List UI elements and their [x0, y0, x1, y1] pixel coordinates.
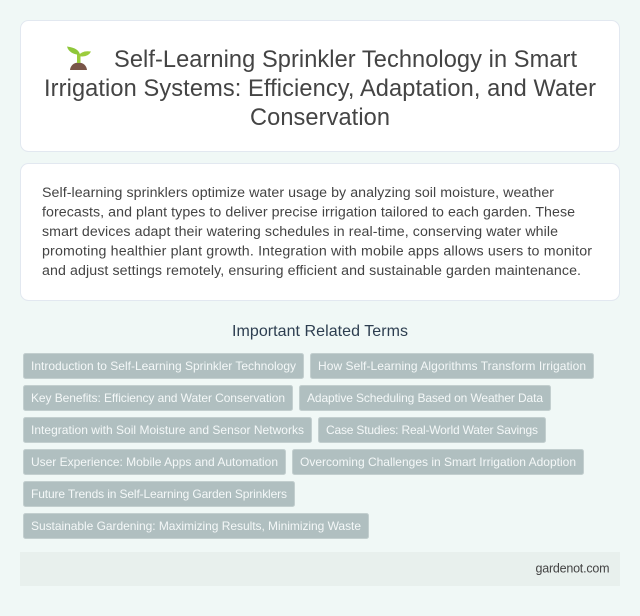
tag: user experience: User Experience: Mobile Apps and Automation	[31, 455, 278, 469]
heading: related terms: Important Related Terms	[232, 323, 408, 340]
tag: user experience	[24, 450, 286, 474]
text block: summary: Self-learning sprinklers optimize water usage by analyzing soil moisture, weather	[42, 185, 554, 201]
title	[44, 47, 596, 131]
panel: summary card	[20, 164, 620, 300]
tag: sustainable gardening: Sustainable Gardening: Maximizing Results, Minimizing Waste	[31, 519, 361, 533]
tag: adaptive scheduling: Adaptive Scheduling Based on Weather Data	[307, 391, 543, 405]
text block: summary: forecasts, and plant types to deliver precise irrigation tailored to each garden. These	[42, 204, 575, 220]
footer: gardenot.com	[536, 562, 610, 576]
tag: sustainable gardening	[24, 514, 368, 538]
tag: challenges: Overcoming Challenges in Smart Irrigation Adoption	[300, 455, 576, 469]
tag: key benefits: Key Benefits: Efficiency and Water Conservation	[31, 391, 285, 405]
text block: summary	[42, 185, 592, 279]
tag: case studies: Case Studies: Real-World Water Savings	[326, 423, 538, 437]
panel: title card	[20, 20, 620, 152]
tag: future trends	[24, 482, 294, 506]
tag: algorithms	[310, 354, 594, 378]
panel: related term tags	[24, 354, 594, 538]
tag: soil moisture	[24, 418, 312, 442]
title: Self-Learning Sprinkler Technology in Smart	[114, 47, 577, 73]
tag: case studies	[318, 418, 546, 442]
title: Conservation	[250, 105, 390, 131]
tag: introduction: Introduction to Self-Learning Sprinkler Technology	[31, 359, 296, 373]
tag: algorithms: How Self-Learning Algorithms Transform Irrigation	[318, 359, 586, 373]
tag: soil moisture: Integration with Soil Moisture and Sensor Networks	[31, 423, 304, 437]
icon: seedling	[67, 46, 91, 70]
tag: adaptive scheduling	[300, 386, 550, 410]
footer	[20, 552, 620, 586]
title: Irrigation Systems: Efficiency, Adaptation, and Water	[44, 76, 596, 102]
tag: future trends: Future Trends in Self-Learning Garden Sprinklers	[31, 487, 287, 501]
text block: summary: and adjust settings remotely, ensuring efficient and sustainable garden maintenance.	[42, 263, 581, 279]
tag: challenges	[292, 450, 584, 474]
text block: summary: smart devices adapt their watering schedules in real-time, conserving water while	[42, 224, 558, 240]
tag: key benefits	[24, 386, 292, 410]
text block: summary: promoting healthier plant growth. Integration with mobile apps allows users to monitor	[42, 244, 592, 260]
tag: introduction	[24, 354, 304, 378]
